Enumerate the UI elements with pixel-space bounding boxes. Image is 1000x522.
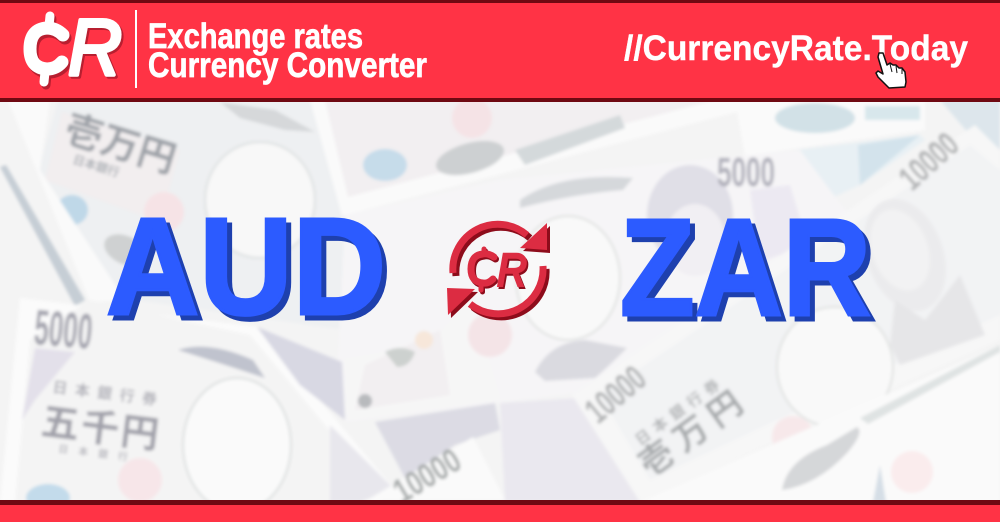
banknote: lower left 5000 yen: 五千円 — [39, 401, 161, 457]
currency code: ZAR: ZAR — [625, 196, 876, 350]
footer bar — [0, 500, 1000, 522]
banknote: lower right 10000 yen: 10000 — [892, 126, 966, 198]
icon: currency exchange arrows: R — [497, 244, 527, 296]
logo: CR mark: R — [68, 3, 122, 92]
icon CR mark shadow — [472, 251, 496, 292]
icon: currency exchange arrows — [447, 223, 550, 318]
banknote: lower right 10000 yen: 10000 — [577, 357, 654, 431]
banknote: top right — [735, 100, 1000, 215]
banknote: left edge strip — [0, 100, 125, 306]
banknote: top-left 10000 yen: 日本銀行 — [71, 152, 121, 180]
background: faded yen banknotes — [0, 98, 1000, 512]
banknote: bottom right — [640, 345, 1000, 502]
header bar — [0, 0, 1000, 102]
currency code: ZAR: ZAR — [620, 191, 871, 345]
logo: CR mark — [30, 3, 124, 94]
arrows — [447, 223, 547, 315]
icon CR mark — [471, 249, 494, 290]
heading: Currency Converter: Currency Converter — [148, 46, 427, 85]
banknote: top centre — [310, 98, 782, 216]
banknote: lower left 5000 yen: 5000 — [32, 299, 95, 360]
site name: //CurrencyRate.Today — [624, 29, 969, 68]
banknote: top-left 10000 yen: 壱万円 — [59, 108, 181, 182]
banknote: lower centre pieces — [257, 327, 640, 511]
icon: currency exchange arrows: R — [498, 246, 528, 298]
banknote: lower centre pieces: 10000 — [387, 441, 468, 511]
banknote: lower left 5000 yen: 日本銀行 — [58, 442, 129, 464]
heading: Exchange rates: Exchange rates — [148, 17, 363, 56]
banknote: top-left 10000 yen — [38, 100, 450, 345]
banknote: centre 5000 yen — [338, 149, 860, 422]
banknote: centre 5000 yen: 5000 — [717, 149, 775, 195]
banknote: lower left 5000 yen: 日本銀行券 — [52, 378, 158, 409]
currency code: AUD: AUD — [111, 195, 391, 349]
currency code: AUD: AUD — [106, 190, 386, 344]
banknote: lower right 10000 yen — [572, 125, 1000, 502]
banknote: lower left 5000 yen — [0, 298, 395, 512]
banknote: lower right 10000 yen: 壱万円 — [632, 384, 750, 484]
banknote: lower right 10000 yen: 日本銀行券 — [632, 376, 723, 449]
arrows shadow — [450, 226, 550, 318]
logo divider — [135, 10, 137, 88]
logo: CR mark: R — [70, 5, 124, 94]
icon: hand cursor — [876, 53, 906, 88]
